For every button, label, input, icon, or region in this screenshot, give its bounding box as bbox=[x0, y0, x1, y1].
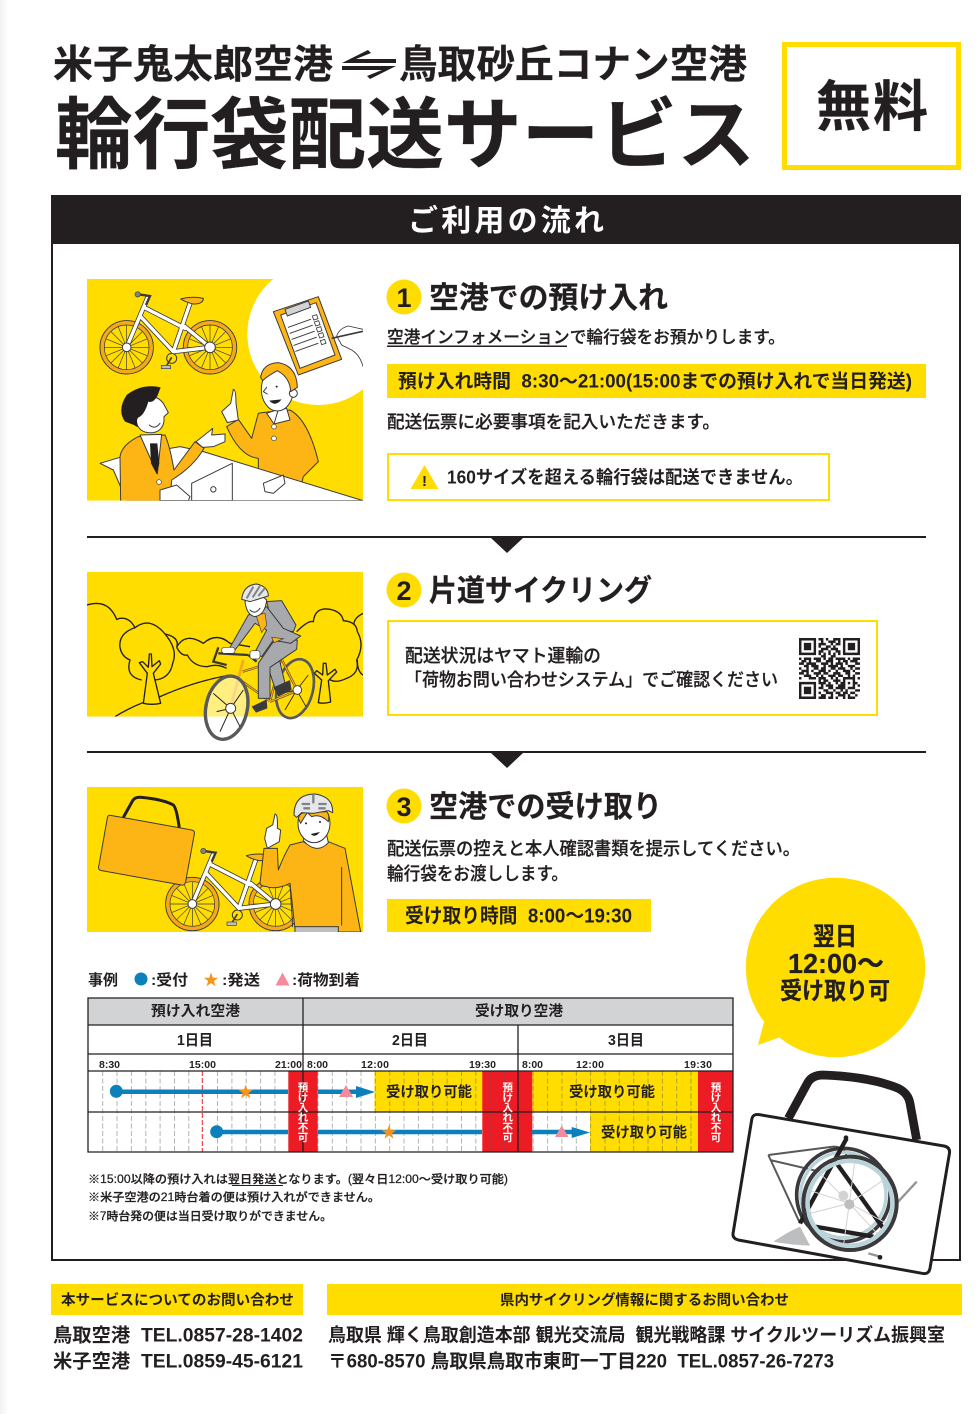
table headers bbox=[151, 1002, 644, 1049]
contact: this service: 本サービスについてのお問い合わせ bbox=[61, 1291, 294, 1309]
back leg bbox=[267, 655, 285, 688]
example row 2 bbox=[210, 1124, 687, 1142]
step 2 heading: 片道サイクリング bbox=[429, 575, 652, 608]
no drop-off labels: 預 bbox=[298, 1081, 309, 1094]
warning box bbox=[388, 454, 829, 500]
no drop-off labels: 可 bbox=[502, 1132, 513, 1144]
icon: warning triangle: ! bbox=[422, 473, 427, 490]
table headers: 受け取り空港 bbox=[475, 1002, 564, 1020]
table headers: 2日目 bbox=[392, 1032, 428, 1049]
pickup hours bar bbox=[387, 899, 651, 932]
legend: 事例 bbox=[88, 971, 118, 989]
legend: :発送 bbox=[222, 971, 260, 989]
legend: :受付 bbox=[151, 971, 188, 989]
tracking info box: 配送状況はヤマト運輸の bbox=[405, 646, 601, 666]
QR code bbox=[799, 639, 860, 698]
step 3 bbox=[386, 788, 800, 932]
step 1 heading: 空港での預け入れ bbox=[429, 282, 668, 315]
callout: next day pickup: 翌日 bbox=[813, 923, 857, 951]
table headers: 1日目 bbox=[177, 1032, 213, 1049]
no drop-off labels: 不 bbox=[711, 1122, 722, 1134]
step 1 bbox=[386, 280, 926, 500]
time labels: 8:00 bbox=[522, 1059, 543, 1071]
contact: this service bbox=[51, 1284, 303, 1372]
example row 1 bbox=[110, 1083, 655, 1101]
front wheel bbox=[200, 672, 254, 743]
illustration: cycling bbox=[87, 572, 363, 743]
subtitle: route: 鳥取砂丘コナン空港 bbox=[399, 44, 747, 87]
no drop-off labels: 可 bbox=[298, 1132, 308, 1144]
no drop-off labels: 預 bbox=[502, 1081, 513, 1094]
title bbox=[53, 44, 755, 179]
time labels: 12:00 bbox=[576, 1059, 604, 1071]
drop-off hours bar: 預け入れ時間 8:30～21:00(15:00までの預け入れで当日発送) bbox=[398, 370, 912, 392]
form note: 配送伝票に必要事項を記入いただきます。 bbox=[387, 412, 720, 432]
illustration: bag pickup bbox=[87, 787, 363, 933]
time labels: 15:00 bbox=[189, 1059, 216, 1071]
step number 1 bbox=[386, 280, 422, 314]
icon: two-way arrows bbox=[342, 50, 396, 79]
step 3 heading: 空港での受け取り bbox=[429, 791, 662, 824]
free badge: 無料 bbox=[816, 76, 928, 138]
table headers: 3日目 bbox=[608, 1032, 644, 1049]
pickup hours bar: 受け取り時間 8:00～19:30 bbox=[405, 904, 632, 928]
no drop-off labels: 不 bbox=[298, 1122, 309, 1134]
panel header bbox=[51, 195, 961, 244]
footnotes: ※15:00以降の預け入れは 翌日発送となります。(翌々日12:00～受け取り可能) bbox=[88, 1172, 508, 1186]
no drop-off labels: 入 bbox=[502, 1102, 513, 1114]
step 3 description bbox=[387, 839, 800, 884]
arrow divider 1 bbox=[87, 536, 926, 553]
callout: next day pickup: 12:00～ bbox=[788, 948, 884, 979]
example row 1: 受け取り可能 bbox=[386, 1083, 472, 1101]
handlebars and fork bbox=[213, 647, 257, 665]
tracking info box bbox=[388, 621, 877, 715]
step 1 description: 空港インフォメーションで輪行袋をお預かりします。 bbox=[387, 328, 785, 347]
arrow divider 2 bbox=[87, 751, 926, 768]
no drop-off labels: 不 bbox=[502, 1122, 513, 1134]
step number 3: 3 bbox=[396, 792, 412, 822]
legend bbox=[88, 971, 360, 989]
step 2 bbox=[386, 572, 877, 715]
callout: next day pickup bbox=[746, 878, 925, 1057]
no drop-off labels: 入 bbox=[298, 1102, 309, 1114]
step number 3 bbox=[386, 788, 422, 824]
time labels: 12:00 bbox=[361, 1059, 389, 1071]
icon: warning triangle bbox=[410, 465, 438, 490]
time labels: 21:00 bbox=[275, 1059, 302, 1071]
time labels: 8:30 bbox=[99, 1059, 120, 1071]
front leg bbox=[258, 640, 297, 698]
no drop-off labels: れ bbox=[711, 1112, 722, 1124]
contact: cycling info: 県内サイクリング情報に関するお問い合わせ bbox=[500, 1291, 789, 1309]
no drop-off labels: け bbox=[298, 1092, 308, 1104]
timetable bbox=[88, 998, 733, 1152]
subtitle: route bbox=[53, 44, 747, 87]
illustration: packed bike bag bbox=[733, 1075, 950, 1274]
tracking info box: 「荷物お問い合わせシステム」でご確認ください bbox=[405, 670, 778, 690]
no drop-off labels: け bbox=[502, 1092, 513, 1104]
step number 1: 1 bbox=[396, 283, 412, 313]
table headers: 預け入れ空港 bbox=[151, 1002, 241, 1020]
contact: this service: 鳥取空港 TEL.0857-28-1402 bbox=[53, 1324, 303, 1346]
no drop-off labels: れ bbox=[502, 1112, 513, 1124]
time labels: 19:30 bbox=[469, 1059, 496, 1071]
footnotes: ※7時台発の便は当日受け取りができません。 bbox=[88, 1209, 332, 1223]
page corner shading bbox=[0, 0, 8, 1414]
step number 2: 2 bbox=[396, 576, 412, 606]
head bbox=[245, 596, 267, 617]
no drop-off labels: け bbox=[711, 1092, 721, 1104]
contact: cycling info: 鳥取県 輝く鳥取創造本部 観光交流局 観光戦略課 サイクルツーリズム振興室 bbox=[328, 1324, 945, 1346]
frame bbox=[240, 660, 297, 702]
free badge bbox=[784, 44, 958, 168]
table grid bbox=[88, 998, 733, 1152]
panel header: ご利用の流れ bbox=[408, 204, 604, 238]
no drop-off labels bbox=[298, 1081, 722, 1144]
no drop-off labels: れ bbox=[298, 1112, 309, 1124]
illustration: airport counter bbox=[87, 279, 363, 501]
step 3 description: 輪行袋をお渡しします。 bbox=[387, 864, 568, 884]
torso and arms bbox=[230, 607, 301, 657]
callout: next day pickup: 受け取り可 bbox=[780, 978, 890, 1005]
example row 2: 受け取り可能 bbox=[601, 1124, 687, 1142]
footnotes: ※米子空港の21時台着の便は預け入れができません。 bbox=[88, 1190, 380, 1204]
example row 1: 受け取り可能 bbox=[569, 1083, 655, 1101]
table fills bbox=[88, 998, 733, 1152]
contact: this service: 米子空港 TEL.0859-45-6121 bbox=[53, 1350, 303, 1372]
no drop-off labels: 可 bbox=[711, 1132, 721, 1144]
legend: :荷物到着 bbox=[292, 971, 360, 989]
panel: flow of use bbox=[51, 195, 961, 1260]
footnotes bbox=[88, 1172, 508, 1223]
time labels: 19:30 bbox=[684, 1059, 712, 1071]
warning box: 160サイズを超える輪行袋は配送できません。 bbox=[447, 466, 803, 488]
drop-off hours bar bbox=[387, 364, 926, 398]
time labels bbox=[99, 1059, 712, 1071]
no drop-off labels: 預 bbox=[711, 1081, 722, 1094]
time labels: 8:00 bbox=[307, 1059, 328, 1071]
backpack bbox=[267, 601, 296, 632]
step number 2 bbox=[386, 572, 422, 608]
subtitle: route: 米子鬼太郎空港 bbox=[53, 44, 333, 87]
contact: cycling info: 〒680-8570 鳥取県鳥取市東町一丁目220 TEL.0857-26-7273 bbox=[328, 1350, 834, 1372]
no drop-off labels: 入 bbox=[711, 1102, 722, 1114]
contact: cycling info bbox=[327, 1284, 962, 1372]
rear wheel bbox=[270, 655, 320, 722]
main title: 輪行袋配送サービス bbox=[55, 91, 755, 179]
step 3 description: 配送伝票の控えと本人確認書類を提示してください。 bbox=[387, 839, 800, 859]
